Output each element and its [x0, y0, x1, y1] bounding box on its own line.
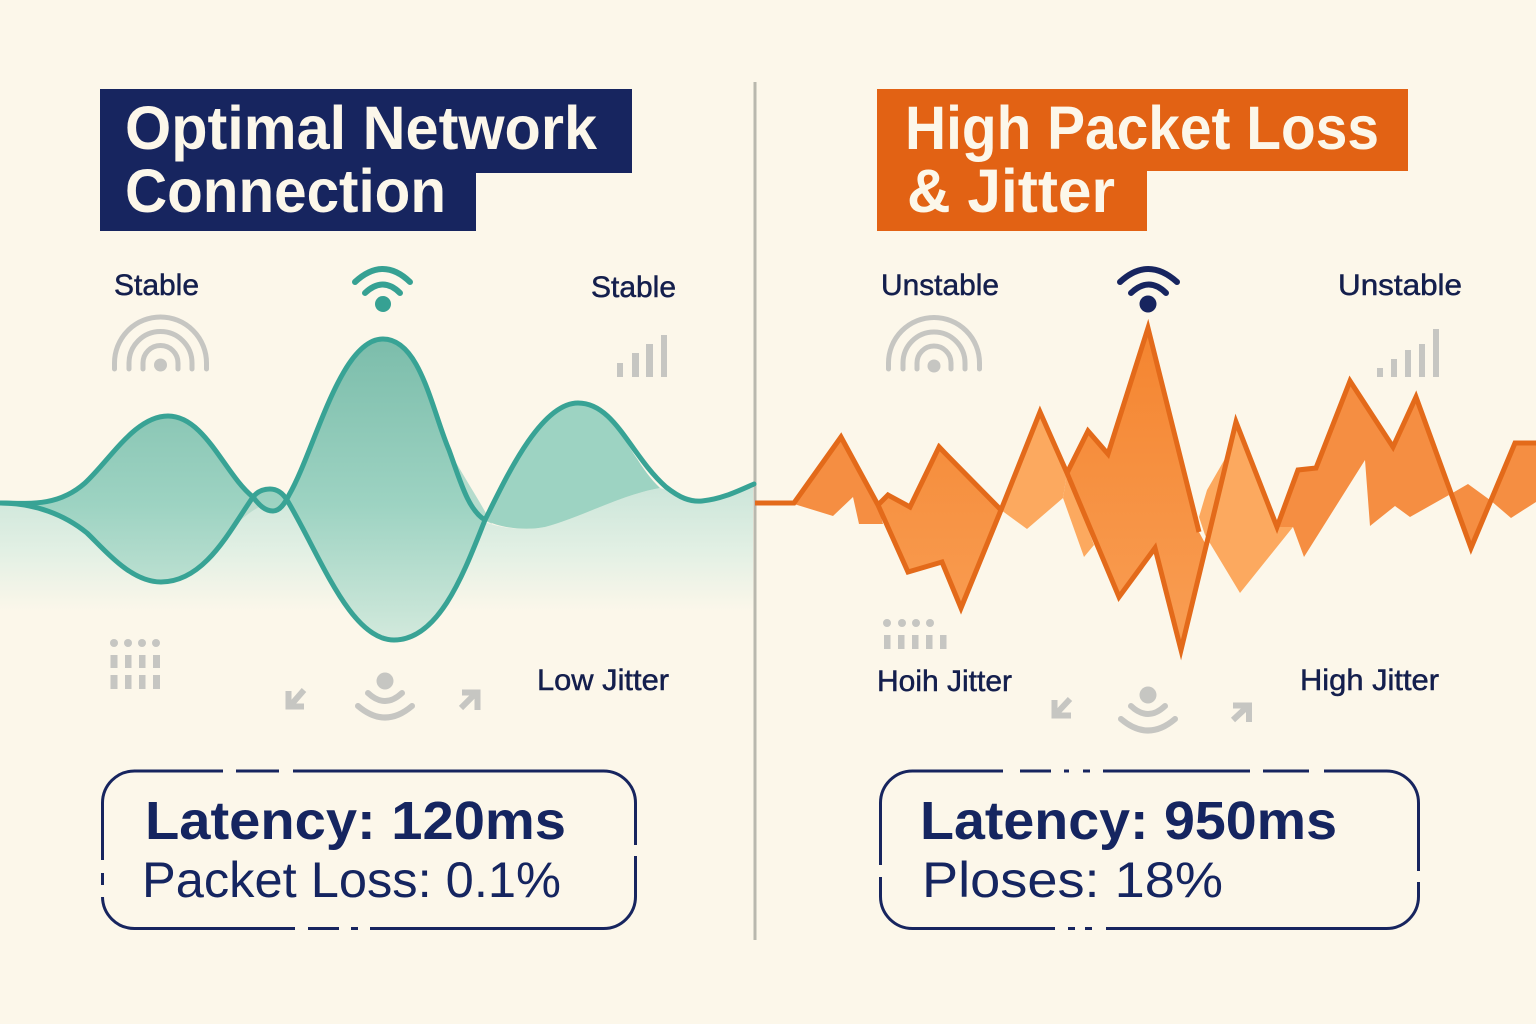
label: High Jitter: High Jitter: [1300, 664, 1439, 697]
stats box: optimal: Latency: 120ms: [145, 791, 566, 851]
icon: grey arrows and receiver: [288, 672, 478, 718]
strand A: [0, 339, 485, 520]
panel: high packet loss and jitter: [755, 89, 1536, 932]
heading: Optimal Network Connection: Optimal Network: [125, 94, 597, 162]
label: Hoih Jitter: Hoih Jitter: [877, 665, 1012, 698]
background band: [0, 485, 753, 612]
stats box: degraded: [877, 768, 1422, 932]
chart: unstable waveform: [755, 328, 1536, 650]
label: Unstable left: Unstable: [881, 269, 999, 302]
icon: grey dot grid: [110, 639, 160, 689]
chart: stable waveform: [0, 339, 754, 640]
label: Stable right: Stable: [591, 271, 676, 304]
icon: teal wifi: [355, 269, 410, 312]
stats box: optimal: Packet Loss: 0.1%: [142, 852, 561, 908]
orange strand A: [755, 381, 1536, 650]
icon: grey broadcast arches: [888, 318, 980, 372]
panel: optimal network connection: [0, 89, 754, 932]
stats box: degraded: Ploses: 18%: [922, 852, 1223, 908]
icon: grey signal bars: [1377, 329, 1439, 377]
icon: grey broadcast arches: [114, 317, 206, 372]
light back fill: [1001, 412, 1067, 529]
icon: grey dot grid: [883, 619, 946, 649]
stats box: degraded: Latency: 950ms: [920, 791, 1337, 851]
heading: Optimal Network Connection: [100, 89, 632, 231]
orange strand C: [1067, 328, 1199, 532]
label: Stable left: Stable: [114, 269, 199, 302]
right hump fill: [485, 403, 660, 529]
icon: grey arrows and receiver: [1054, 686, 1249, 730]
orange strand B: [878, 447, 1001, 510]
strand B: [0, 403, 754, 640]
label: Low Jitter: Low Jitter: [537, 664, 669, 697]
center divider: [754, 82, 756, 940]
label: Unstable right: Unstable: [1338, 269, 1462, 302]
icon: grey signal bars: [617, 335, 667, 377]
heading: High Packet Loss & Jitter: & Jitter: [907, 157, 1115, 225]
heading: High Packet Loss & Jitter: High Packet Loss: [905, 94, 1379, 162]
mid back fill: [794, 437, 883, 524]
heading: Optimal Network Connection: Connection: [125, 157, 446, 225]
main fill: [878, 443, 1001, 608]
icon: navy wifi: [1120, 269, 1177, 312]
fill between strands: [0, 339, 485, 640]
stats box: optimal: [99, 768, 639, 932]
heading: High Packet Loss & Jitter: [877, 89, 1408, 231]
